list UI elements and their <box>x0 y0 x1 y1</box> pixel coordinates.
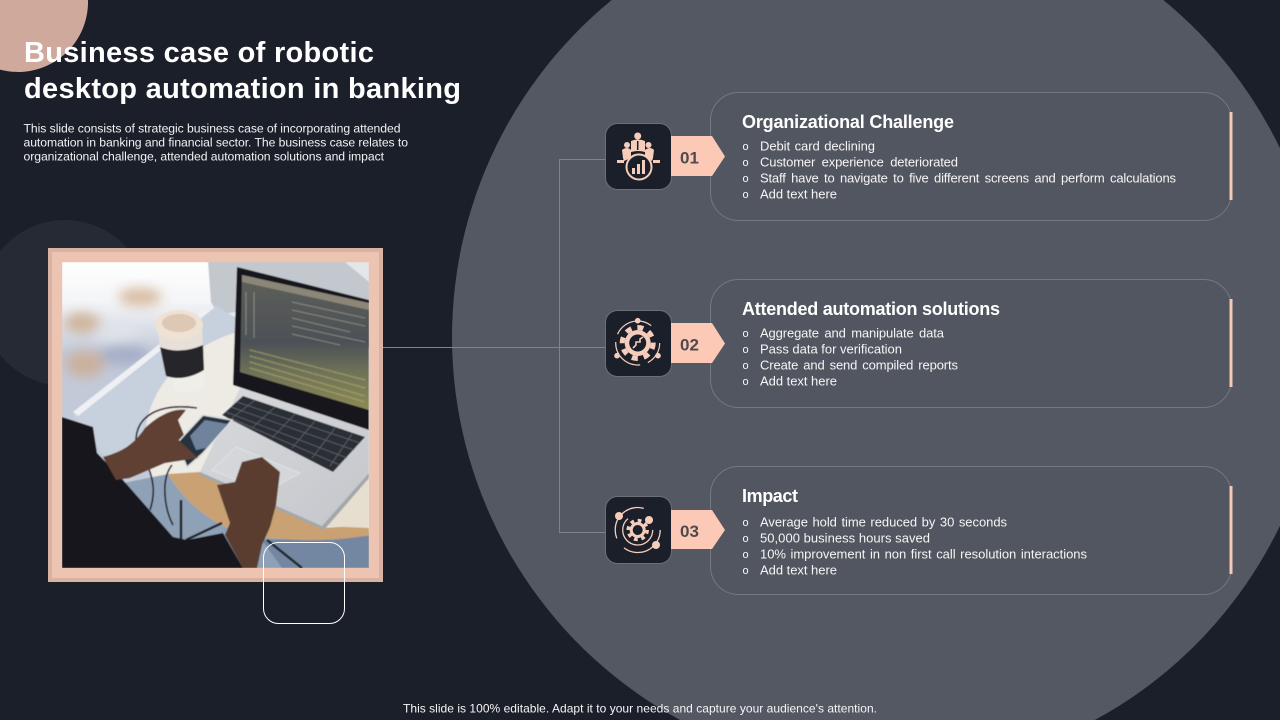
title: desktop automation in banking <box>24 73 461 105</box>
card: Impact <box>710 466 1232 594</box>
description text <box>24 122 408 164</box>
icon: gear with orbit <box>606 310 672 376</box>
cable <box>136 407 197 525</box>
bullet list: Aggregate and manipulate data <box>760 326 945 340</box>
footer note: This slide is 100% editable. Adapt it to your needs and capture your audience's attention. <box>403 702 877 716</box>
card: Organizational Challenge <box>710 92 1232 220</box>
phone <box>177 415 232 467</box>
table top <box>146 332 369 532</box>
bullet list: o <box>742 173 749 185</box>
table legs <box>181 500 302 568</box>
right arm and hand <box>217 457 280 568</box>
bullet list: o <box>742 141 749 153</box>
bullet list: Customer experience deteriorated <box>760 154 958 170</box>
bullet list: o <box>742 157 749 169</box>
bullet list: o <box>742 376 749 388</box>
bullet list: o <box>742 344 749 356</box>
bullet list: Add text here <box>760 374 837 388</box>
icon: team with chart <box>606 124 672 190</box>
arrow tag 02: 02 <box>680 336 699 354</box>
arrow tag 03: 03 <box>680 522 699 541</box>
trackpad <box>212 446 300 485</box>
description text: organizational challenge, attended automation solutions and impact <box>24 150 385 164</box>
bullet list <box>742 138 1176 202</box>
laptop base <box>200 388 369 526</box>
step 3 <box>606 466 1232 594</box>
bullet list: o <box>742 189 749 201</box>
bullet list: Add text here <box>760 562 837 578</box>
decorative circle: top left <box>0 0 88 72</box>
decorative circle: behind photo <box>0 220 148 386</box>
arrow tag 03 <box>671 510 725 549</box>
description text: automation in banking and financial sector. The business case relates to <box>24 136 408 150</box>
bullet list: o <box>742 549 749 561</box>
step 2 <box>606 280 1232 408</box>
large grey circle <box>452 0 1280 720</box>
bullet list: o <box>742 328 749 340</box>
left arm and hand <box>102 409 186 480</box>
heading: Attended automation solutions <box>742 299 1000 319</box>
title: Business case of robotic <box>24 37 374 69</box>
window sill and ledge <box>134 306 236 374</box>
bullet list: o <box>742 565 749 577</box>
arrow tag 02 <box>671 323 725 363</box>
cup <box>155 310 204 378</box>
pillar and view beyond the laptop <box>208 262 369 315</box>
bullet list: o <box>742 533 749 545</box>
bullet list: Add text here <box>760 186 837 202</box>
step 1 <box>606 92 1232 220</box>
photo: laptop on cafe table <box>62 262 369 568</box>
bullet list: 10% improvement in non first call resolution interactions <box>760 546 1088 562</box>
bullet list: o <box>742 360 749 372</box>
keyboard <box>222 396 365 472</box>
bullet list: Create and send compiled reports <box>760 358 958 372</box>
icon: gear with orbiting dots <box>606 496 672 564</box>
person <box>62 417 243 568</box>
white rounded outline <box>264 542 344 624</box>
photo frame overlay <box>48 248 383 582</box>
bullet list: o <box>742 517 749 529</box>
laptop screen <box>233 267 369 430</box>
table edge <box>168 472 369 540</box>
heading: Organizational Challenge <box>742 112 954 132</box>
bullet list <box>742 514 1088 578</box>
title <box>24 37 461 105</box>
bullet list: Debit card declining <box>760 138 875 154</box>
bullet list: 50,000 business hours saved <box>760 530 930 546</box>
floor <box>125 474 369 568</box>
bullet list <box>742 326 958 388</box>
card: Attended automation solutions <box>710 280 1232 408</box>
bullet list: Pass data for verification <box>760 342 902 356</box>
photo frame <box>48 248 383 582</box>
bullet list: Average hold time reduced by 30 seconds <box>760 514 1008 530</box>
heading: Impact <box>742 486 798 506</box>
bullet list: Staff have to navigate to five different screens and perform calculations <box>760 170 1176 186</box>
description text: This slide consists of strategic business case of incorporating attended <box>24 122 400 136</box>
arrow tag 01: 01 <box>680 148 699 168</box>
connector lines <box>383 160 605 532</box>
photo with frame <box>48 248 383 582</box>
arrow tag 01 <box>671 136 725 176</box>
